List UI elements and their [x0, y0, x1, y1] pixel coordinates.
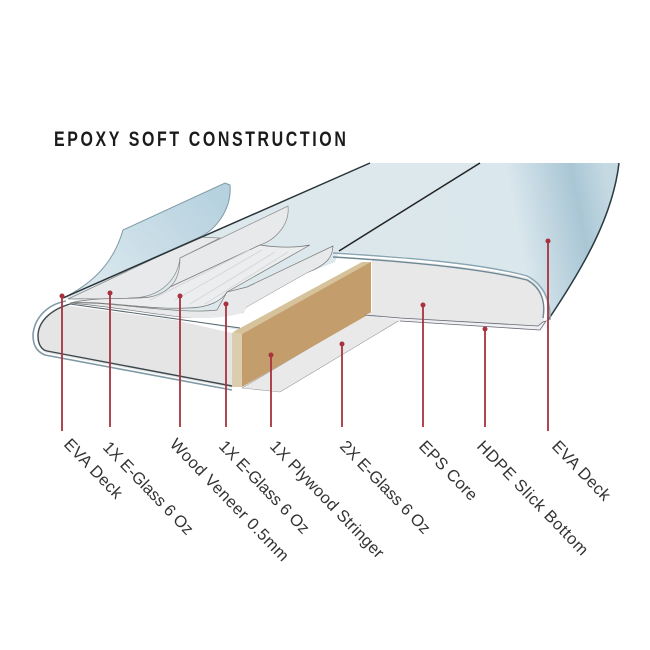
veneer grain	[150, 250, 288, 304]
white gap	[137, 262, 335, 329]
layer labels: 1X Plywood Stringer	[266, 437, 388, 562]
slick bottom	[365, 315, 546, 330]
board illustration	[33, 163, 619, 392]
stringer edge	[232, 329, 242, 387]
left core	[38, 305, 232, 388]
plywood stringer	[242, 262, 371, 387]
left shell outline	[33, 301, 232, 390]
right deck surface	[338, 163, 619, 320]
layer labels: EVA Deck	[548, 437, 614, 505]
layer labels: EPS Core	[415, 437, 481, 504]
left deck surface	[63, 163, 480, 330]
layer labels: 1X E-Glass 6 Oz	[99, 438, 197, 539]
stringer top strip	[233, 262, 372, 334]
title: EPOXY SOFT CONSTRUCTION	[54, 127, 346, 151]
flap: EVA deck	[63, 183, 230, 298]
right core	[365, 258, 544, 326]
layer labels: 2X E-Glass 6 Oz	[336, 437, 434, 538]
flap: third E-glass	[70, 246, 333, 319]
lower E-glass sheet	[242, 315, 400, 392]
flap: second E-glass edge	[170, 206, 288, 287]
right shell layers	[333, 253, 550, 320]
layer labels: Wood Veneer 0.5mm	[166, 435, 292, 565]
layer labels	[60, 435, 614, 565]
layer labels: 1X E-Glass 6 Oz	[215, 437, 313, 538]
layer labels: EVA Deck	[60, 435, 126, 503]
layer labels: HDPE Slick Bottom	[473, 437, 592, 559]
flap: first E-glass	[68, 237, 220, 299]
flap: wood veneer	[70, 245, 310, 308]
callout lines and markers	[60, 238, 550, 431]
deck outlines	[63, 163, 370, 298]
